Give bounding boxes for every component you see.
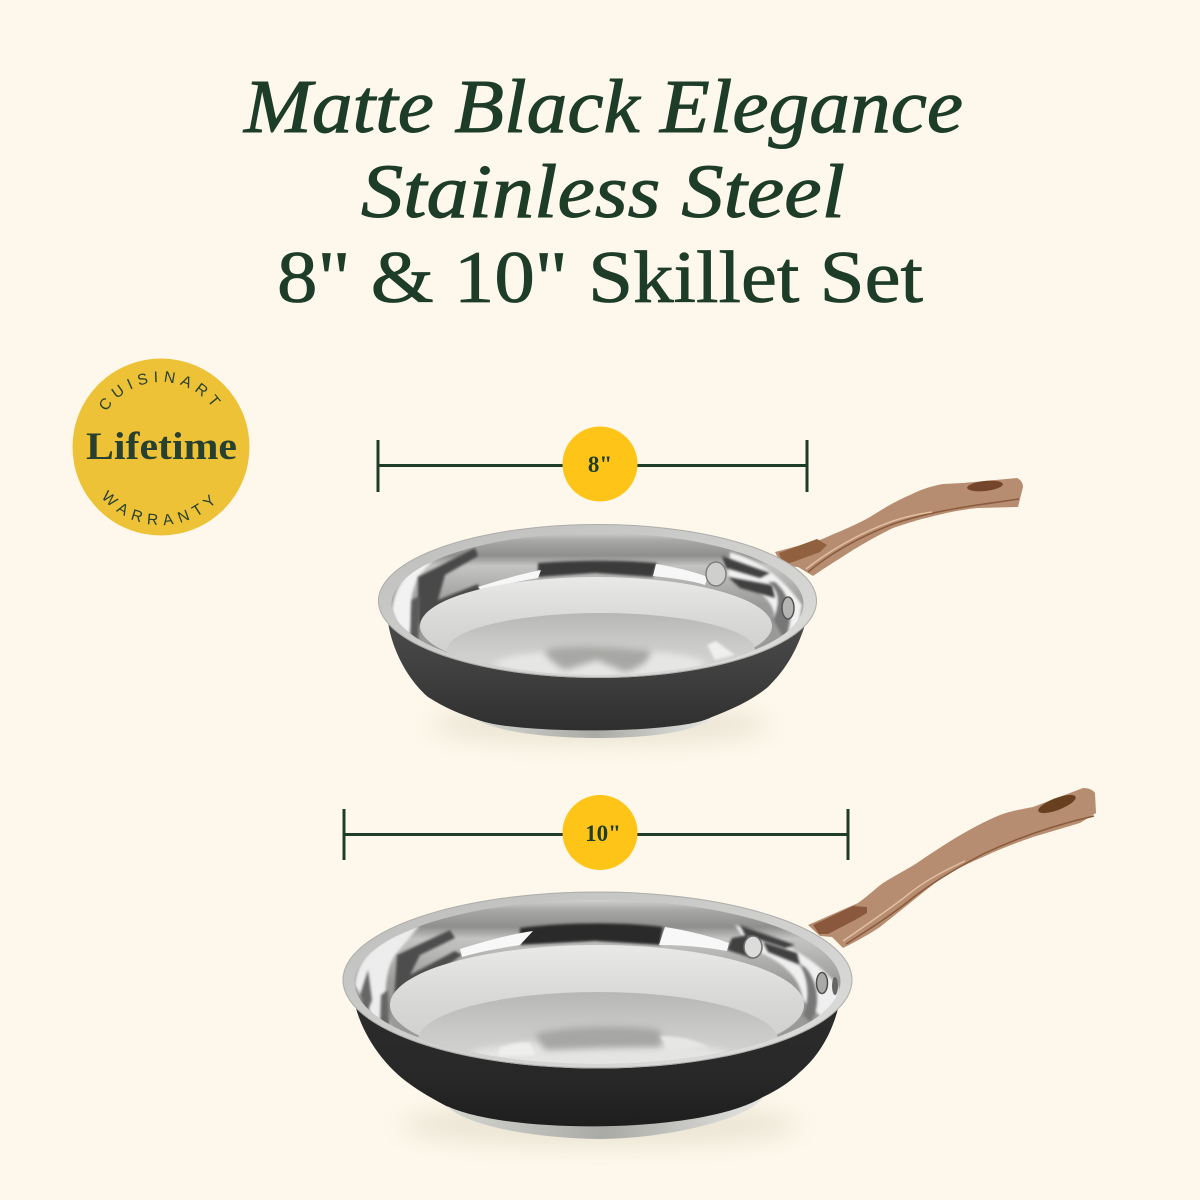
base ring — [447, 1097, 763, 1139]
handle — [775, 478, 1023, 576]
title: Stainless Steel — [361, 150, 845, 234]
black body — [388, 622, 806, 732]
badge: Cuisinart lifetime warranty: CUISINART — [100, 371, 221, 410]
title — [243, 65, 963, 319]
interior — [354, 900, 840, 1064]
title: Matte Black Elegance — [243, 65, 963, 149]
rim highlight — [378, 524, 816, 678]
stainless rim — [378, 524, 817, 678]
rivets — [744, 936, 838, 995]
dimension marker: 8 inch: 8" — [588, 452, 612, 477]
dimension marker: 10 inch: 10" — [585, 821, 621, 846]
handle — [808, 788, 1096, 948]
rim highlight — [343, 892, 852, 1068]
skillet: 10 inch — [342, 788, 1096, 1147]
base ring — [478, 718, 712, 738]
rivets — [706, 562, 794, 619]
badge: Cuisinart lifetime warranty: Lifetime — [86, 425, 237, 468]
skillet: 8 inch — [378, 478, 1023, 745]
interior — [392, 535, 804, 675]
badge: Cuisinart lifetime warranty — [72, 358, 250, 536]
dimension marker: 8 inch — [378, 426, 807, 502]
badge: Cuisinart lifetime warranty: WARRANTY — [103, 490, 214, 526]
black body — [354, 1000, 840, 1128]
dimension marker: 10 inch — [344, 795, 848, 870]
title: 8" & 10" Skillet Set — [277, 237, 923, 319]
stainless rim — [342, 892, 852, 1068]
